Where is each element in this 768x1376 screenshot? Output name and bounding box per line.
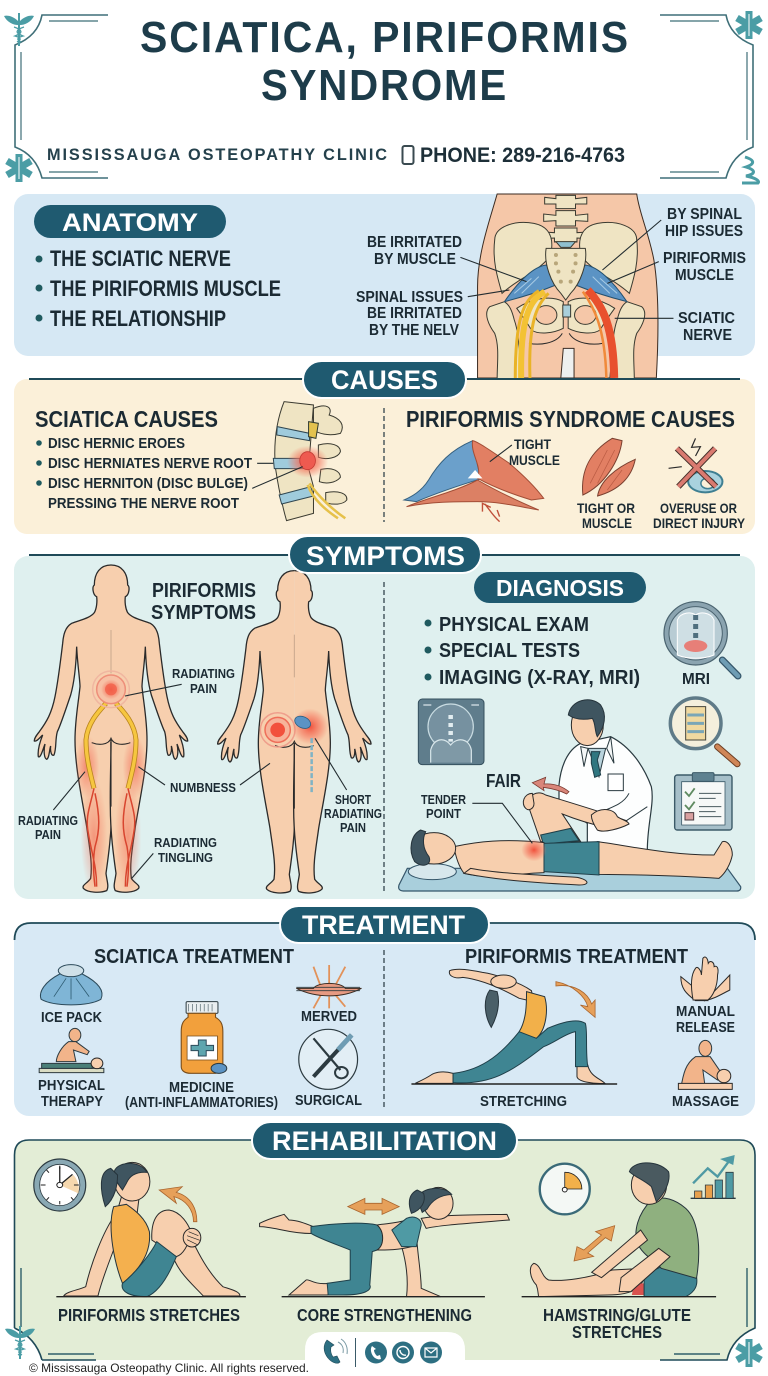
diagnosis labels bbox=[421, 671, 710, 821]
treatment icons bbox=[39, 957, 732, 1089]
symptom labels: RADIATING bbox=[172, 666, 235, 681]
diagnosis list: IMAGING (X-RAY, MRI) bbox=[439, 666, 640, 689]
icon: spine magnifier bbox=[670, 698, 737, 764]
diagnosis heading bbox=[474, 572, 646, 603]
figure: seated hamstring stretch bbox=[522, 1163, 716, 1297]
icon: phone bbox=[402, 146, 414, 164]
pelvis illustration bbox=[460, 194, 673, 379]
icon: ice pack bbox=[40, 965, 102, 1005]
icon: star of life bottom right bbox=[737, 1339, 761, 1367]
treatment labels: ICE PACK bbox=[41, 1010, 102, 1026]
arrow: leg stretch bbox=[574, 1226, 615, 1261]
leader lines bbox=[53, 684, 347, 878]
figure: seated piriformis stretch bbox=[56, 1162, 246, 1297]
icon: overuse injury bbox=[669, 438, 722, 492]
sciatica causes text: DISC HERNIATES NERVE ROOT bbox=[48, 455, 252, 472]
panel: treatment bbox=[14, 906, 755, 1116]
copyright: © Mississauga Osteopathy Clinic. All rights reserved. bbox=[29, 1361, 309, 1375]
panel: symptoms bbox=[14, 536, 755, 899]
symptom labels: TINGLING bbox=[158, 850, 213, 865]
panel: rehabilitation bbox=[14, 1122, 755, 1360]
symptom labels: PAIN bbox=[35, 827, 61, 842]
treatment heading: TREATMENT bbox=[302, 910, 465, 940]
icon: massage bbox=[678, 1040, 732, 1089]
rehabilitation heading: REHABILITATION bbox=[272, 1126, 497, 1156]
pillow bbox=[408, 864, 456, 880]
piriformis symptoms heading: SYMPTOMS bbox=[151, 601, 256, 624]
diagnosis labels: POINT bbox=[426, 806, 461, 821]
symptom labels bbox=[18, 666, 382, 865]
anatomy heading bbox=[34, 205, 226, 238]
anatomy labels right: PIRIFORMIS bbox=[663, 250, 746, 267]
anatomy heading: ANATOMY bbox=[62, 209, 198, 237]
anatomy labels left: BE IRRITATED bbox=[367, 305, 462, 322]
contact bar bbox=[305, 1332, 465, 1376]
figure: back view with buttock pain bbox=[218, 571, 371, 893]
rehabilitation heading bbox=[252, 1122, 517, 1159]
tight or muscle label: TIGHT OR bbox=[577, 500, 635, 516]
rehabilitation labels: STRETCHES bbox=[572, 1322, 662, 1342]
tight muscle label: TIGHT bbox=[514, 436, 551, 452]
symptom labels: NUMBNESS bbox=[170, 780, 236, 795]
sciatica causes text: DISC HERNIC EROES bbox=[48, 435, 185, 452]
treatment mat bbox=[399, 868, 741, 891]
arrow: stretch direction bbox=[159, 1187, 197, 1222]
overuse label: OVERUSE OR bbox=[660, 500, 737, 516]
treatment labels: (ANTI-INFLAMMATORIES) bbox=[125, 1095, 278, 1111]
icon: ringing phone bbox=[324, 1340, 340, 1363]
icon: MRI magnifier bbox=[664, 602, 738, 676]
anatomy list: THE RELATIONSHIP bbox=[50, 306, 226, 331]
overuse label: DIRECT INJURY bbox=[653, 515, 746, 531]
arrow: stretch direction bbox=[556, 982, 595, 1017]
tight muscle label: MUSCLE bbox=[509, 452, 560, 468]
doctor bbox=[559, 700, 652, 850]
treatment labels: SURGICAL bbox=[295, 1093, 362, 1109]
rehabilitation labels: HAMSTRING/GLUTE bbox=[543, 1305, 691, 1325]
sciatica causes text: SCIATICA CAUSES bbox=[35, 406, 218, 432]
treatment labels: MASSAGE bbox=[672, 1094, 739, 1110]
causes heading: CAUSES bbox=[331, 365, 438, 395]
treatment labels: MANUAL bbox=[676, 1004, 735, 1020]
leader lines bbox=[460, 220, 673, 318]
title: SCIATICA, PIRIFORMIS bbox=[140, 13, 630, 62]
anatomy list: THE PIRIFORMIS MUSCLE bbox=[50, 276, 281, 301]
tender point leader bbox=[472, 803, 532, 843]
sciatica causes text: DISC HERNITON (DISC BULGE) bbox=[48, 475, 248, 492]
symptom labels: SHORT bbox=[335, 792, 371, 807]
figure: back view with nerve pain bbox=[34, 565, 188, 895]
title: SYNDROME bbox=[261, 61, 508, 110]
piriformis symptoms heading bbox=[151, 579, 256, 624]
diagnosis list: PHYSICAL EXAM bbox=[439, 613, 589, 636]
icon: medicine bottle bbox=[181, 1002, 227, 1073]
symptom labels: RADIATING bbox=[154, 835, 217, 850]
anatomy list bbox=[36, 246, 281, 331]
body figures bbox=[34, 565, 371, 895]
doctor hands bbox=[523, 793, 629, 831]
tight or muscle label: MUSCLE bbox=[582, 515, 632, 531]
diagnosis list bbox=[424, 613, 640, 689]
piriformis symptoms heading: PIRIFORMIS bbox=[152, 579, 256, 602]
anatomy labels right bbox=[663, 206, 746, 344]
arrow: FAIR rotation bbox=[532, 777, 569, 794]
icon: wall clock bbox=[34, 1159, 86, 1211]
symptom labels: PAIN bbox=[190, 681, 217, 696]
icon: surgical tools bbox=[299, 1029, 358, 1089]
diagnosis labels: FAIR bbox=[486, 771, 521, 791]
diagnosis labels: MRI bbox=[682, 671, 710, 688]
icon: piriformis muscle bbox=[404, 441, 544, 522]
diagnosis heading: DIAGNOSIS bbox=[496, 575, 624, 601]
rehabilitation figures bbox=[34, 1155, 736, 1297]
diagnosis labels: TENDER bbox=[421, 792, 467, 807]
anatomy labels right: MUSCLE bbox=[675, 267, 734, 284]
panel: anatomy bbox=[14, 194, 755, 379]
symptom labels: RADIATING bbox=[324, 806, 382, 821]
rehabilitation labels: CORE STRENGTHENING bbox=[297, 1305, 472, 1325]
rehabilitation labels: PIRIFORMIS STRETCHES bbox=[58, 1305, 240, 1325]
diagnosis illustration bbox=[399, 602, 741, 891]
icon: mail circle bbox=[420, 1342, 442, 1364]
anatomy labels right: NERVE bbox=[683, 327, 732, 344]
clinic name: MISSISSAUGA OSTEOPATHY CLINIC bbox=[47, 145, 389, 164]
treatment labels: STRETCHING bbox=[480, 1094, 567, 1110]
patient bbox=[411, 793, 732, 885]
icon: caduceus bottom left bbox=[5, 1326, 35, 1359]
leader lines bbox=[252, 463, 303, 488]
header frame bbox=[4, 11, 761, 183]
treatment labels: MEDICINE bbox=[169, 1080, 234, 1096]
icon: nerve bbox=[296, 965, 361, 1008]
symptoms heading bbox=[289, 536, 481, 573]
sciatica treatment heading: SCIATICA TREATMENT bbox=[94, 946, 294, 968]
tight or muscle label bbox=[577, 500, 635, 531]
icon: x-ray film bbox=[418, 699, 484, 765]
anatomy labels right: HIP ISSUES bbox=[665, 223, 743, 240]
icon: manual release hand bbox=[681, 957, 730, 1001]
overuse label bbox=[653, 500, 746, 531]
arrow: balance direction bbox=[348, 1198, 399, 1214]
tight muscle label bbox=[509, 436, 560, 468]
sciatica causes text bbox=[35, 406, 252, 512]
anatomy labels right: SCIATIC bbox=[678, 310, 735, 327]
piriformis treatment heading: PIRIFORMIS TREATMENT bbox=[465, 946, 688, 968]
phone number: PHONE: 289-216-4763 bbox=[420, 144, 625, 167]
sciatica causes text: PRESSING THE NERVE ROOT bbox=[48, 495, 239, 512]
treatment labels: PHYSICAL bbox=[38, 1078, 105, 1094]
icon: timer bbox=[540, 1164, 590, 1214]
icon: star of life bottom left bbox=[7, 154, 31, 182]
causes heading bbox=[303, 361, 466, 398]
rehabilitation labels bbox=[58, 1305, 691, 1342]
anatomy labels left: BY MUSCLE bbox=[374, 251, 456, 268]
treatment labels: RELEASE bbox=[676, 1020, 735, 1036]
icon: caduceus top left bbox=[4, 13, 34, 46]
treatment labels bbox=[38, 1004, 739, 1111]
treatment heading bbox=[280, 906, 489, 943]
icon: progress chart bbox=[691, 1155, 736, 1198]
treatment labels: MERVED bbox=[301, 1009, 357, 1025]
icon: whatsapp circle bbox=[392, 1342, 414, 1364]
icon: physical therapy bbox=[39, 1028, 104, 1073]
figure: core strengthening bbox=[260, 1187, 509, 1297]
symptom labels: RADIATING bbox=[18, 813, 78, 828]
icon: spring bottom right bbox=[742, 157, 758, 183]
icon: phone circle bbox=[365, 1342, 387, 1364]
anatomy labels left: BE IRRITATED bbox=[367, 234, 462, 251]
spine illustration bbox=[252, 402, 347, 521]
figure: lunge stretch bbox=[411, 969, 617, 1084]
panel: causes bbox=[14, 361, 755, 534]
anatomy labels left: BY THE NELV bbox=[369, 322, 460, 339]
anatomy labels left bbox=[356, 234, 463, 339]
icon: star of life top right bbox=[737, 11, 761, 39]
symptom labels: PAIN bbox=[340, 820, 366, 835]
treatment labels: THERAPY bbox=[41, 1094, 103, 1110]
anatomy labels left: SPINAL ISSUES bbox=[356, 289, 463, 306]
diagnosis list: SPECIAL TESTS bbox=[439, 639, 580, 662]
icon: clipboard bbox=[675, 773, 732, 830]
title bbox=[140, 13, 630, 110]
symptoms heading: SYMPTOMS bbox=[306, 541, 465, 571]
anatomy labels right: BY SPINAL bbox=[667, 206, 742, 223]
anatomy list: THE SCIATIC NERVE bbox=[50, 246, 231, 271]
icon: tight muscle bbox=[582, 438, 635, 496]
